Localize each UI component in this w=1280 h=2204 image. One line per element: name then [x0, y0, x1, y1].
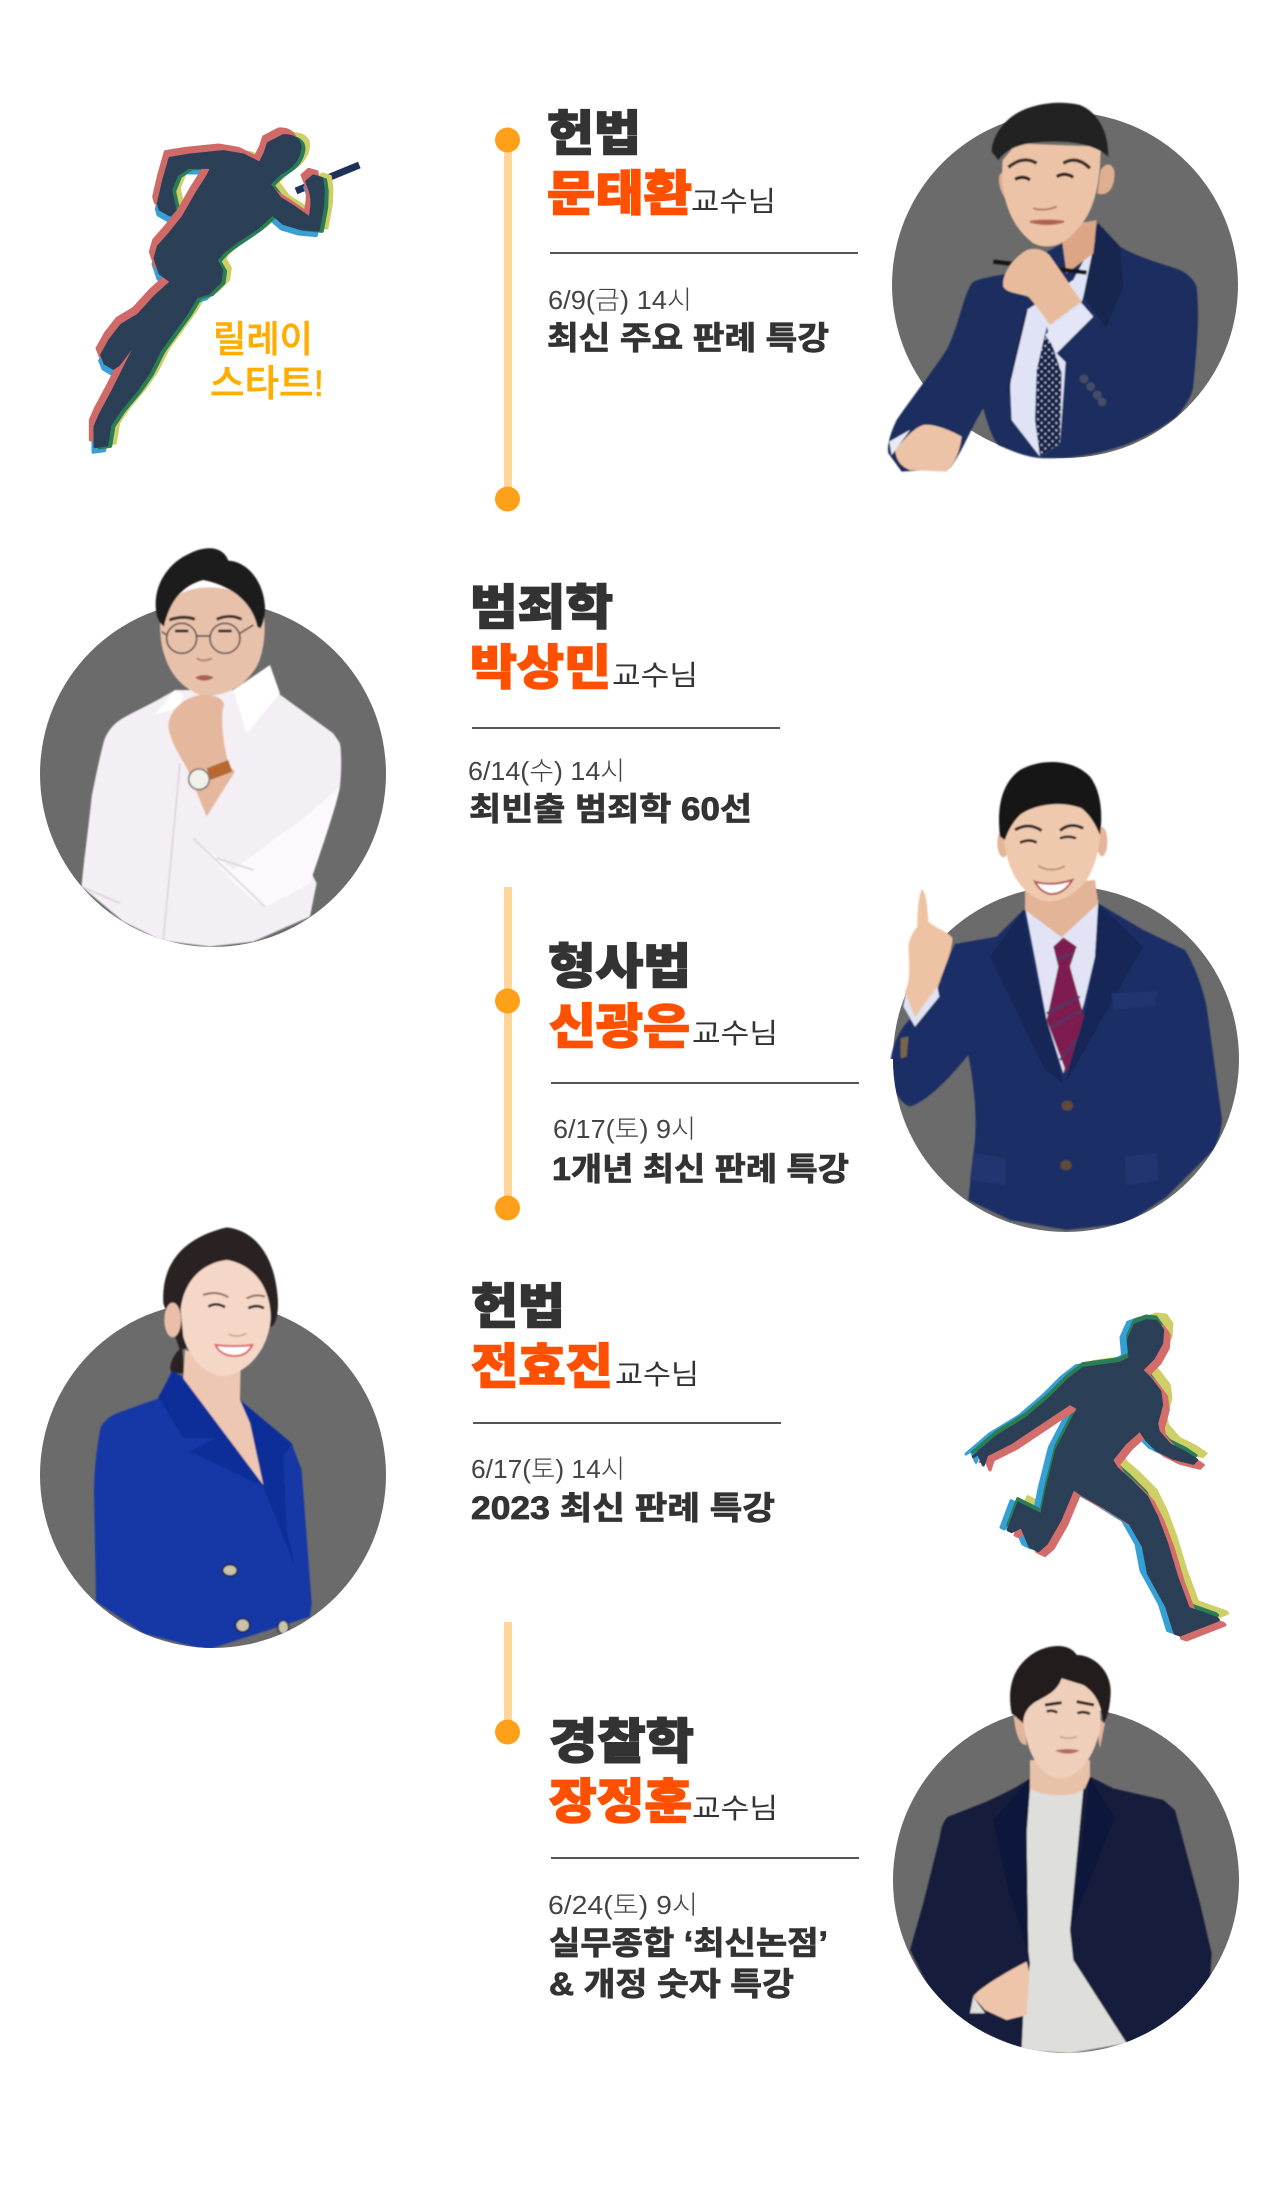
lecture title: 1개년 최신 판례 특강 — [552, 1151, 849, 1187]
portrait: Park Sang-min — [40, 548, 386, 947]
date: 6/24(토) 9시 — [548, 1890, 698, 1920]
professor name: 전효진 — [471, 1341, 613, 1394]
timeline: first segment — [495, 128, 520, 512]
date: 6/14(수) 14시 — [468, 756, 625, 786]
panel: police science, Jang — [548, 1716, 859, 2002]
icon: relay runner with baton — [90, 129, 359, 452]
subject heading: 형사법 — [548, 941, 691, 994]
professor name: 박상민 — [470, 642, 611, 695]
subject heading: 헌법 — [471, 1281, 565, 1334]
date: 6/17(토) 14시 — [471, 1454, 625, 1484]
honorific: 교수님 — [692, 1793, 778, 1824]
subject heading: 경찰학 — [549, 1716, 694, 1769]
lecture title: 최신 주요 판례 특강 — [547, 320, 829, 356]
honorific: 교수님 — [612, 660, 698, 691]
panel: criminology, Park — [468, 582, 780, 827]
portrait: Jeon Hyo-jin — [40, 1227, 386, 1650]
callout: relay start — [210, 319, 324, 404]
lecture title: 2023 최신 판례 특강 — [471, 1490, 775, 1526]
professor name: 신광은 — [549, 1001, 690, 1054]
lecture title: 실무종합 ‘최신논점’ — [549, 1925, 828, 1961]
panel: criminal law, Shin — [548, 941, 859, 1187]
lecture title: & 개정 숫자 특강 — [549, 1966, 794, 2002]
callout: relay start: 릴레이 — [213, 319, 313, 360]
subject heading: 범죄학 — [470, 582, 613, 635]
timeline: third segment — [495, 1622, 520, 1744]
professor name: 문태환 — [547, 168, 692, 221]
date: 6/9(금) 14시 — [548, 285, 692, 315]
portrait: Shin Kwang-eun — [890, 762, 1239, 1232]
portrait: Jang Jung-hoon — [893, 1646, 1239, 2053]
lecture title: 최빈출 범죄학 60선 — [469, 791, 752, 827]
portrait: Moon Tae-hwan — [888, 103, 1238, 472]
callout: relay start: 스타트! — [210, 363, 324, 404]
honorific: 교수님 — [615, 1359, 699, 1390]
honorific: 교수님 — [691, 186, 776, 217]
panel: constitutional law, Jeon — [471, 1281, 781, 1526]
icon: running figure — [966, 1314, 1228, 1640]
professor name: 장정훈 — [549, 1776, 692, 1829]
subject heading: 헌법 — [547, 108, 641, 161]
date: 6/17(토) 9시 — [553, 1114, 696, 1144]
panel: constitutional law, Moon — [547, 108, 858, 356]
honorific: 교수님 — [692, 1018, 778, 1049]
timeline: second segment — [495, 887, 520, 1220]
lecture title — [549, 1925, 828, 2002]
